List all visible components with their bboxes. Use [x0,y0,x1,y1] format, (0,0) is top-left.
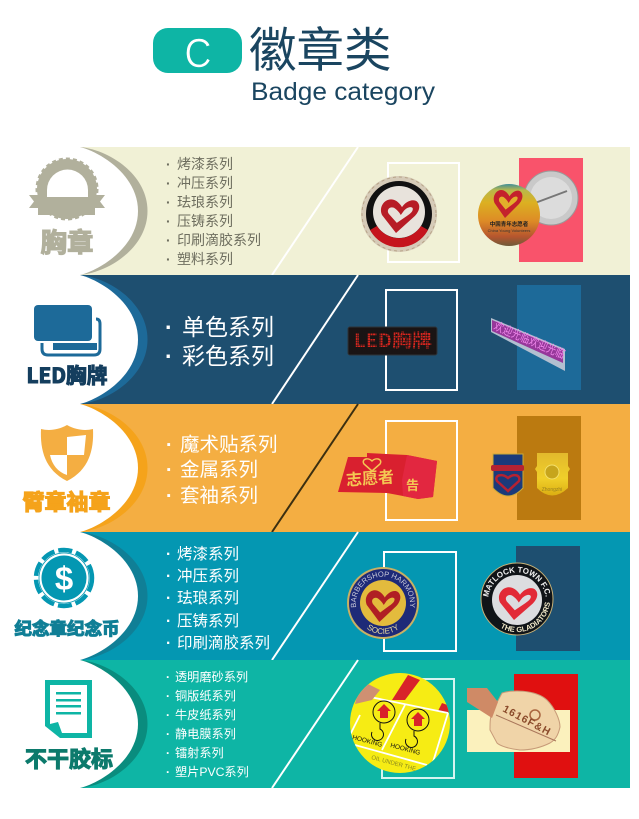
image: yellow hazard stickers: OIL UNDER THE [370,755,416,773]
image: kraft paper seal sticker [467,688,570,752]
list: adhesive label series [166,670,249,779]
image: yellow hazard stickers: HOOKING [389,742,421,757]
list: commemorative series: · [166,635,171,652]
image: gold pin: Zhongzhi [542,487,562,493]
list: adhesive label series: 静电膜系列 [175,727,236,741]
image: Matlock Town badge [480,562,554,636]
image: pin-back button badge [478,171,578,246]
list: commemorative series: · [166,546,171,563]
list: chest badge series: · [166,251,171,267]
list: chest badge series: · [166,232,171,248]
list: adhesive label series: 镭射系列 [175,745,224,760]
list: commemorative series: 冲压系列 [177,567,239,585]
image: red volunteer armband: 告 [406,475,419,494]
panel: chest badges [0,147,630,275]
list: commemorative series: · [166,568,171,585]
icon: shield [41,425,93,481]
list: chest badge series: · [166,213,171,229]
list: chest badge series: · [166,156,171,172]
panel: commemorative badges and coins [14,532,630,660]
list: chest badge series [166,156,261,267]
heading: Chinese title: 徽章类 [249,12,392,81]
list: commemorative series: · [166,613,171,630]
list: chest badge series: 珐琅系列 [177,194,233,210]
image: Matlock Town badge: MATLOCK TOWN F.C. [482,566,550,597]
label: chest badge: 胸章 [40,221,94,260]
list: LED series [165,314,274,369]
list: armband series [166,434,278,507]
label: commemorative badge and coin: 纪念章纪念币 [14,616,120,641]
icon: stacked LED cards [34,305,100,355]
image: Matlock Town badge: THE GLADIATORS [502,602,550,632]
list: adhesive label series: · [166,727,170,741]
title block [153,12,436,106]
list: chest badge series: 塑料系列 [177,251,233,267]
list: chest badge series: · [166,194,171,210]
pill: category letter C: C [184,30,212,76]
list: armband series: · [166,485,172,507]
list: adhesive label series: · [166,689,170,703]
image: gold pin [535,453,570,496]
image: red volunteer armband [338,453,437,499]
heading: English subtitle: Badge category [251,78,436,106]
list: armband series: · [166,434,172,456]
label: armband and sleeve badge: 臂章袖章 [22,485,111,517]
list: adhesive label series: · [166,765,170,779]
list: commemorative series: · [166,590,171,607]
label: LED badge: LED胸牌 [26,360,108,390]
list: chest badge series: 烤漆系列 [177,156,233,172]
image: Barbershop Harmony badge: SOCIETY [367,624,398,634]
pill: category letter C [153,28,242,76]
image: yellow hazard stickers [350,673,450,773]
list: commemorative series: 珐琅系列 [177,589,239,607]
image: LED name badge: LED胸牌 [354,327,432,353]
list: chest badge series: 印刷滴胶系列 [177,232,261,248]
list: adhesive label series: · [166,746,170,760]
image: pin-back button badge: China Young Volunteers [488,228,530,233]
panel: adhesive labels [0,660,630,788]
list: adhesive label series: · [166,670,170,684]
list: adhesive label series: 透明磨砂系列 [175,670,248,684]
list: chest badge series: 压铸系列 [177,213,233,229]
list: armband series: 魔术贴系列 [180,434,278,456]
list: commemorative series: 印刷滴胶系列 [177,634,270,652]
icon: dollar coin: $ [55,560,73,597]
list: armband series: · [166,459,172,481]
list: chest badge series: 冲压系列 [177,175,233,191]
panel: armbands and sleeve badges [0,404,630,532]
list: commemorative series: 压铸系列 [177,612,239,630]
list: adhesive label series: 牛皮纸系列 [175,707,236,722]
icon: document with curled corner [45,680,92,738]
icon: rosette badge [29,159,105,219]
image: shield pin [491,454,524,496]
list: adhesive label series: · [166,708,170,722]
list: adhesive label series: 塑片PVC系列 [175,764,249,779]
image: Barbershop Harmony badge [347,567,419,639]
image: LED strip sign: 欢迎光临欢迎光临 [491,317,568,362]
list: commemorative series: 烤漆系列 [177,545,239,563]
list: chest badge series: · [166,175,171,191]
image: Barbershop Harmony badge: BARBERSHOP HARMONY [350,571,416,608]
list: LED series: 彩色系列 [182,343,274,369]
icon: dollar coin [36,550,92,606]
list: armband series: 金属系列 [180,459,258,481]
image: yellow hazard stickers: HOOKING [351,734,383,749]
label: adhesive label: 不干胶标 [25,742,113,774]
list: armband series: 套袖系列 [180,485,258,507]
image: enamel heart badge [361,176,437,252]
list: LED series: · [165,343,173,369]
image: kraft paper seal sticker: 1616F&H [501,703,552,738]
image: red volunteer armband: 志愿者 [345,463,395,491]
image: pin-back button badge: 中国青年志愿者 [490,220,529,228]
panel: LED badges [0,275,630,404]
list: LED series: 单色系列 [182,314,274,340]
list: adhesive label series: 铜版纸系列 [175,688,236,703]
list: LED series: · [165,314,173,340]
list: commemorative series [166,545,270,652]
